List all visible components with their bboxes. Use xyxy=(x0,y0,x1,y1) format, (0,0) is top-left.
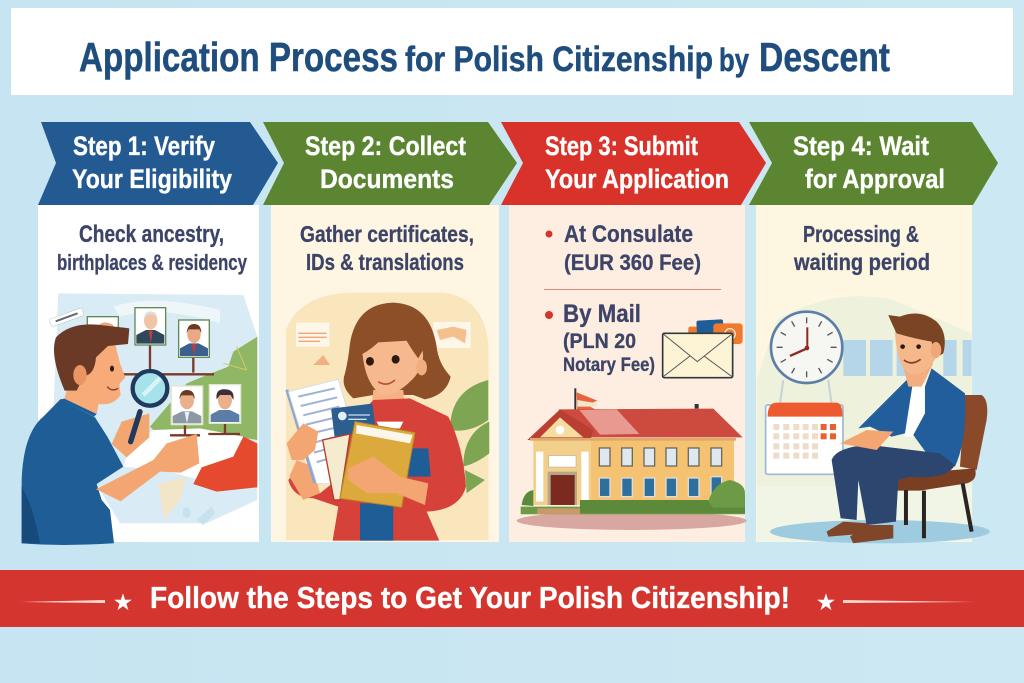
mail option: (PLN 20 xyxy=(563,330,636,353)
consulate option: (EUR 360 Fee) xyxy=(564,250,701,275)
panel 4 text: Processing & xyxy=(803,221,919,247)
mail option: Notary Fee) xyxy=(563,355,655,376)
woman xyxy=(285,303,466,541)
man xyxy=(22,324,199,545)
panel 1 text: Check ancestry, xyxy=(79,221,224,248)
title: by xyxy=(719,42,749,78)
chevron: step 1: Step 1: Verify xyxy=(73,131,215,161)
consulate option: At Consulate xyxy=(564,221,693,248)
ID card xyxy=(331,404,376,437)
illustration: woman holding documents xyxy=(285,293,489,541)
chevron: step 4 xyxy=(749,122,998,205)
magnifying glass xyxy=(131,371,167,442)
panel 4 text xyxy=(793,221,930,275)
footer banner: ★ xyxy=(817,592,835,614)
chevron: step 2: Step 2: Collect xyxy=(305,131,466,161)
consulate option xyxy=(546,221,701,275)
footer banner: ★ xyxy=(114,592,132,614)
chevron: step 4: Step 4: Wait xyxy=(793,131,929,161)
chevron: step 4: for Approval xyxy=(805,164,945,194)
label tag xyxy=(49,308,84,327)
illustration: man waiting with clock and calendar xyxy=(757,296,990,543)
leaves xyxy=(450,380,489,493)
windows xyxy=(599,448,722,466)
illustration: consulate building xyxy=(517,388,747,530)
portrait: grandmother xyxy=(179,320,209,357)
illustration: man inspecting family tree on a map xyxy=(22,293,257,545)
portrait: grandfather xyxy=(135,308,166,345)
clock xyxy=(771,312,842,383)
chevron: step 2 xyxy=(263,122,517,205)
title: Application Process xyxy=(79,34,398,80)
panel 2 text: IDs & translations xyxy=(306,249,464,275)
chevron: step 2: Documents xyxy=(320,164,454,194)
footer banner: Follow the Steps to Get Your Polish Citizenship! xyxy=(150,580,790,615)
panel: step 2 body xyxy=(271,205,499,542)
chevron: step 1 xyxy=(38,122,278,205)
chevron: step 1: Your Eligibility xyxy=(72,164,232,194)
title: Descent xyxy=(759,34,890,80)
mail option: By Mail xyxy=(563,300,641,328)
panel 4 text: waiting period xyxy=(793,249,930,275)
man xyxy=(827,313,965,543)
icon: envelope xyxy=(663,319,743,378)
panel 2 text: Gather certificates, xyxy=(300,221,474,247)
chevron: step 3 xyxy=(501,122,766,205)
calendar xyxy=(766,380,843,474)
yellow folder xyxy=(340,422,415,507)
white report xyxy=(285,379,348,484)
portrait: parent xyxy=(171,386,203,425)
title xyxy=(11,8,1013,95)
panel 2 text xyxy=(300,221,474,275)
family tree connectors xyxy=(120,345,240,435)
mail option xyxy=(545,300,655,376)
chevron: step 3: Your Application xyxy=(545,164,729,194)
panel: step 3 body xyxy=(509,205,747,542)
portrait: relative xyxy=(209,385,241,423)
panel 1 text xyxy=(57,221,248,275)
panel: step 4 body xyxy=(756,205,990,543)
chevron: step 3: Step 3: Submit xyxy=(545,131,698,161)
footer banner xyxy=(0,570,1024,627)
panel: step 1 body xyxy=(22,205,259,545)
chair xyxy=(897,395,987,538)
title: for Polish Citizenship xyxy=(405,40,713,79)
panel 1 text: birthplaces & residency xyxy=(57,250,248,275)
